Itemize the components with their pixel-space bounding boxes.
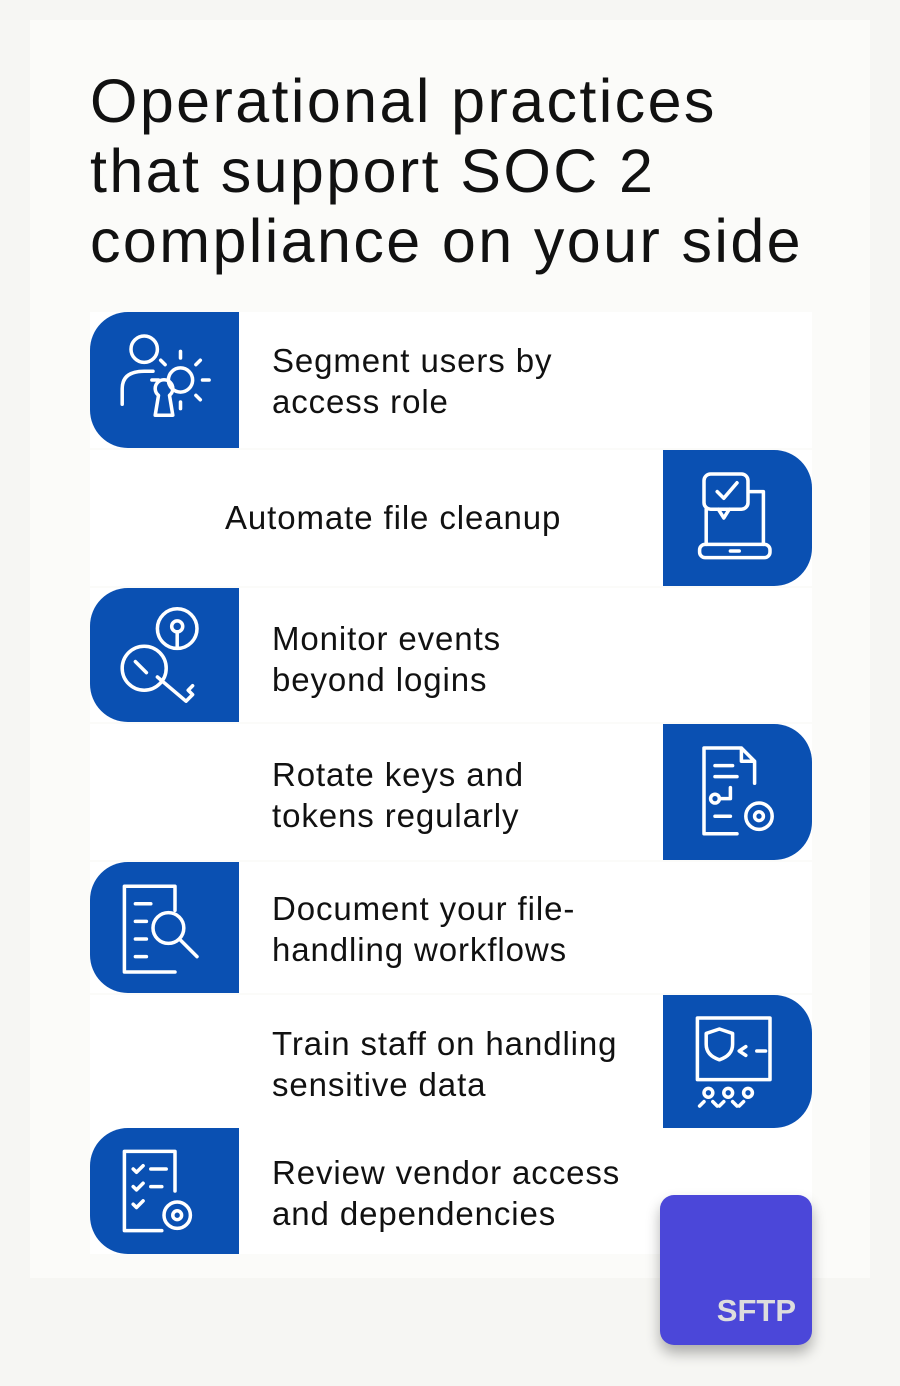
text — [272, 890, 575, 968]
row: document workflows — [90, 862, 812, 993]
row: automate cleanup — [90, 450, 812, 586]
title: compliance on your side — [90, 207, 803, 275]
icon: presentation shield — [663, 995, 812, 1128]
text: Automate file cleanup — [225, 499, 561, 536]
text — [272, 620, 501, 698]
text — [272, 1154, 620, 1232]
text: access role — [272, 383, 449, 420]
text — [272, 756, 524, 834]
text: Monitor events — [272, 620, 501, 657]
text: beyond logins — [272, 661, 487, 698]
icon: document gear — [663, 724, 812, 860]
text — [272, 1025, 617, 1103]
row: train staff — [90, 995, 812, 1128]
icon: key magnifier — [90, 588, 239, 722]
text: and dependencies — [272, 1195, 556, 1232]
icon: document search — [90, 862, 239, 993]
row: segment users — [90, 312, 812, 448]
text: sensitive data — [272, 1066, 486, 1103]
title — [90, 67, 803, 275]
icon: checklist gear — [90, 1128, 239, 1254]
text: Segment users by — [272, 342, 552, 379]
title: Operational practices — [90, 67, 717, 135]
icon: user gear keyhole — [90, 312, 239, 448]
text: handling workflows — [272, 931, 567, 968]
text: Document your file- — [272, 890, 575, 927]
icon: laptop check — [663, 450, 812, 586]
text: Train staff on handling — [272, 1025, 617, 1062]
badge: SFTP: SFTP — [717, 1293, 796, 1328]
row: rotate keys — [90, 724, 812, 860]
text — [272, 342, 552, 420]
text: Rotate keys and — [272, 756, 524, 793]
title: that support SOC 2 — [90, 137, 655, 205]
row: monitor events — [90, 588, 812, 722]
text: tokens regularly — [272, 797, 519, 834]
badge: SFTP — [660, 1195, 812, 1345]
row: review vendor — [90, 1128, 812, 1254]
text: Review vendor access — [272, 1154, 620, 1191]
